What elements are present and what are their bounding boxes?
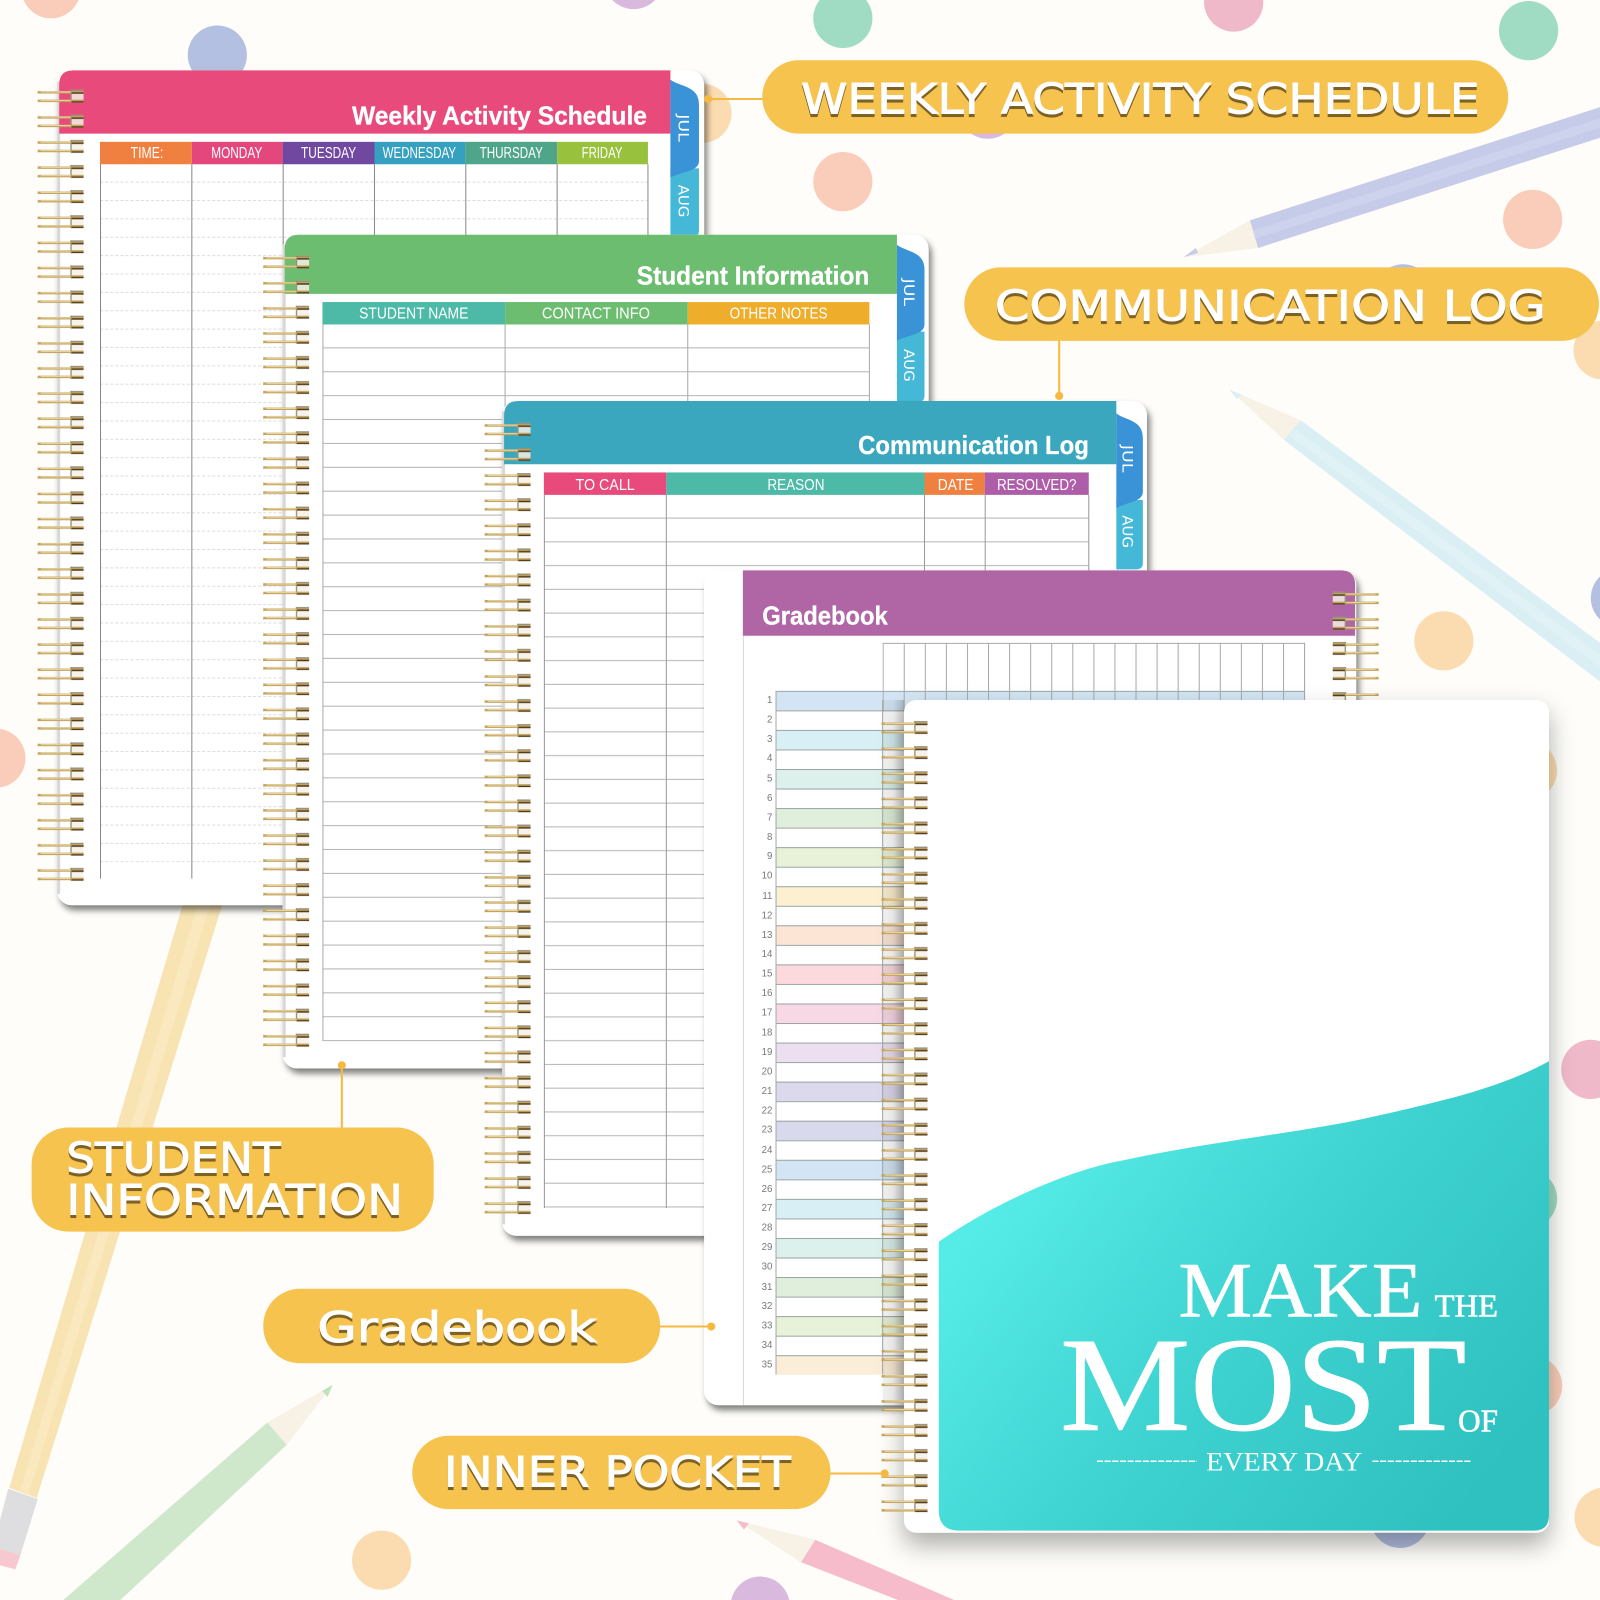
row numbers: 9 bbox=[767, 851, 772, 862]
teal inner pocket bbox=[939, 1061, 1549, 1531]
callout: student information: INFORMATION bbox=[66, 1175, 403, 1224]
row numbers: 30 bbox=[762, 1261, 773, 1272]
row numbers: 25 bbox=[762, 1164, 772, 1175]
row numbers: 29 bbox=[762, 1242, 772, 1253]
spiral binding bbox=[263, 251, 309, 1054]
tabs bbox=[897, 245, 924, 402]
header band bbox=[285, 235, 897, 294]
row numbers: 4 bbox=[767, 753, 773, 764]
row numbers: 15 bbox=[762, 969, 772, 980]
cover slogan: THE bbox=[1435, 1288, 1498, 1323]
column headers: STUDENT NAME bbox=[359, 305, 468, 322]
callout: inner pocket bbox=[412, 1436, 889, 1509]
row numbers: 14 bbox=[762, 949, 773, 960]
row numbers: 27 bbox=[762, 1203, 772, 1214]
spiral binding bbox=[38, 85, 84, 888]
row numbers: 7 bbox=[767, 812, 772, 823]
row numbers: 28 bbox=[762, 1223, 772, 1234]
column headers bbox=[100, 142, 648, 164]
row numbers: 32 bbox=[762, 1301, 772, 1312]
column headers: TUESDAY bbox=[301, 145, 356, 162]
row numbers: 31 bbox=[762, 1282, 772, 1293]
callout: gradebook: Gradebook bbox=[317, 1303, 598, 1352]
pencil: pink bbox=[737, 1520, 954, 1600]
row numbers: 35 bbox=[762, 1359, 772, 1370]
assignment grid bbox=[883, 643, 1305, 700]
cover slogan: EVERY DAY bbox=[1206, 1446, 1362, 1476]
row numbers: 26 bbox=[762, 1184, 772, 1195]
title: Weekly Activity Schedule bbox=[352, 102, 647, 130]
column headers: CONTACT INFO bbox=[542, 305, 650, 322]
front cover notebook bbox=[882, 700, 1549, 1533]
row numbers: 19 bbox=[762, 1047, 772, 1058]
row numbers: 16 bbox=[762, 988, 772, 999]
header band bbox=[743, 570, 1355, 636]
title: Student Information bbox=[637, 263, 869, 291]
callout: weekly activity schedule bbox=[704, 60, 1508, 134]
row numbers: 23 bbox=[762, 1125, 772, 1136]
coloured student rows bbox=[776, 691, 1305, 1375]
column headers: DATE bbox=[938, 477, 973, 494]
callout: gradebook bbox=[263, 1289, 715, 1363]
row numbers: 10 bbox=[762, 871, 773, 882]
notebook page: weekly activity schedule bbox=[38, 70, 704, 905]
callout: communication log bbox=[964, 267, 1599, 400]
cover slogan: MAKE bbox=[1179, 1246, 1422, 1333]
row numbers: 8 bbox=[767, 832, 772, 843]
row numbers: 11 bbox=[762, 891, 772, 902]
column headers: TO CALL bbox=[576, 477, 635, 494]
row numbers: 13 bbox=[762, 930, 772, 941]
column headers: MONDAY bbox=[211, 145, 262, 162]
header band bbox=[59, 70, 670, 134]
callout: weekly activity schedule: WEEKLY ACTIVITY SCHEDULE bbox=[801, 74, 1480, 123]
tabs: AUG bbox=[900, 349, 916, 382]
column headers: REASON bbox=[767, 477, 824, 494]
column headers: OTHER NOTES bbox=[730, 305, 828, 322]
row numbers: 20 bbox=[762, 1066, 773, 1077]
row numbers: 24 bbox=[762, 1145, 773, 1156]
notebook page: gradebook bbox=[704, 570, 1379, 1405]
cover slogan: MOST bbox=[1060, 1311, 1466, 1459]
cover slogan bbox=[1060, 1246, 1498, 1476]
row numbers: 21 bbox=[762, 1086, 772, 1097]
callout: student information bbox=[32, 1061, 434, 1232]
column headers: THURSDAY bbox=[480, 145, 543, 162]
header band bbox=[504, 401, 1116, 464]
tabs bbox=[1116, 413, 1143, 569]
notebook page: communication log bbox=[485, 401, 1147, 1236]
spiral binding, right edge bbox=[1333, 587, 1379, 712]
row numbers: 5 bbox=[767, 774, 772, 785]
cover slogan: OF bbox=[1458, 1404, 1498, 1439]
row numbers: 18 bbox=[762, 1028, 772, 1039]
row numbers: 22 bbox=[762, 1105, 772, 1116]
row numbers: 17 bbox=[762, 1007, 772, 1018]
notebook page: student information bbox=[263, 235, 929, 1068]
pencil: lilac bbox=[1184, 107, 1600, 257]
pencil: green bbox=[63, 1385, 333, 1600]
column headers bbox=[322, 302, 869, 324]
tabs bbox=[670, 80, 699, 237]
row numbers bbox=[762, 695, 773, 1370]
callout: communication log: COMMUNICATION LOG bbox=[995, 281, 1546, 330]
callout: student information: STUDENT bbox=[66, 1133, 281, 1182]
row numbers: 3 bbox=[767, 734, 772, 745]
tabs: AUG bbox=[675, 185, 691, 217]
row numbers: 33 bbox=[762, 1321, 772, 1332]
title: Gradebook bbox=[762, 602, 889, 630]
tabs: JUL bbox=[1118, 444, 1134, 472]
callout: inner pocket: INNER POCKET bbox=[444, 1448, 791, 1497]
column headers bbox=[544, 472, 1089, 495]
spiral binding bbox=[485, 418, 531, 1221]
spiral binding bbox=[882, 716, 928, 1519]
column headers: RESOLVED? bbox=[997, 477, 1077, 494]
column headers: FRIDAY bbox=[582, 145, 622, 162]
tabs: AUG bbox=[1118, 515, 1134, 548]
title: Communication Log bbox=[858, 432, 1089, 460]
column headers: WEDNESDAY bbox=[383, 145, 456, 162]
row numbers: 34 bbox=[762, 1340, 773, 1351]
tabs: JUL bbox=[675, 113, 691, 142]
pencil: light blue bbox=[1230, 390, 1600, 682]
row numbers: 6 bbox=[767, 793, 772, 804]
pencil: yellow bbox=[0, 898, 224, 1569]
row numbers: 1 bbox=[767, 695, 772, 706]
row numbers: 2 bbox=[767, 714, 772, 725]
tabs: JUL bbox=[900, 277, 916, 306]
row numbers: 12 bbox=[762, 910, 772, 921]
column headers: TIME: bbox=[131, 145, 163, 162]
